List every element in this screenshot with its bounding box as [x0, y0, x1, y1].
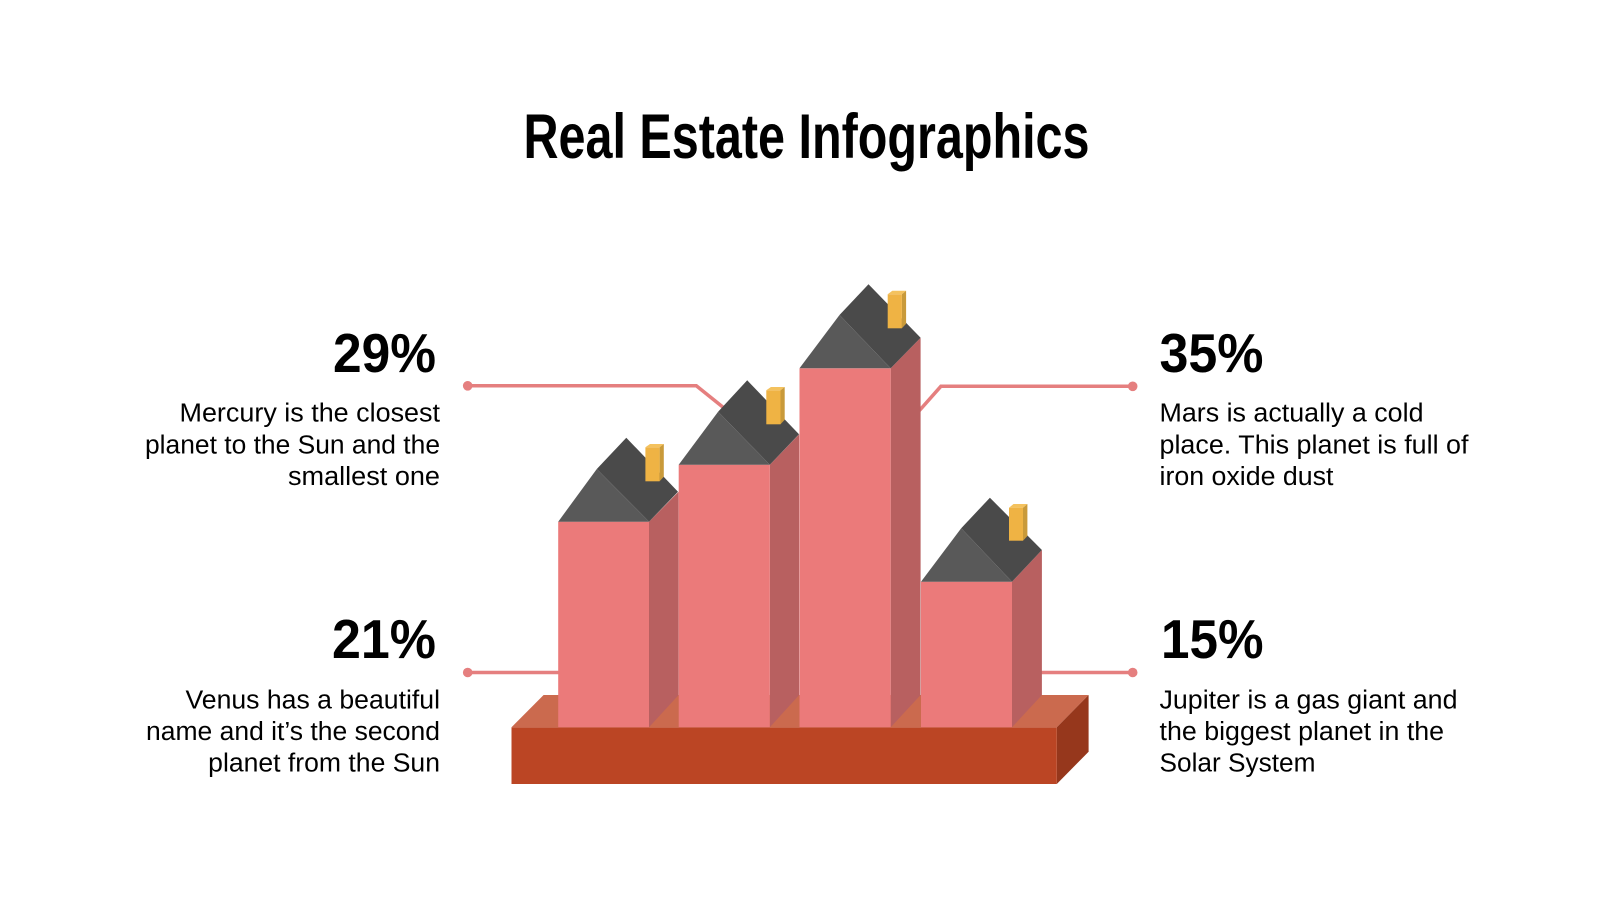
text: Venus description — [146, 686, 440, 778]
text: Mars description: Mars is actually a cold — [1160, 400, 1424, 428]
icon: chimney — [645, 444, 664, 481]
text: Mars description — [1160, 400, 1469, 491]
text: Mercury description — [145, 400, 440, 491]
house 3 — [800, 284, 921, 727]
text: Mercury description: planet to the Sun and the — [145, 431, 440, 459]
leader line: 29% — [463, 381, 724, 408]
leader line: 21% — [463, 668, 560, 677]
title: Real Estate Infographics — [524, 102, 1090, 172]
text: Mercury description: smallest one — [288, 463, 440, 491]
callout: 21% Venus — [146, 608, 440, 778]
callout: 35% Mars — [1160, 322, 1469, 491]
icon: chimney — [888, 291, 906, 328]
callout: 29% Mercury — [145, 322, 440, 491]
text: Jupiter description — [1160, 686, 1458, 778]
house 1 — [558, 438, 679, 727]
icon: chimney — [1009, 504, 1027, 541]
text: Venus description: Venus has a beautiful — [186, 686, 440, 714]
callout: 15% Jupiter — [1160, 608, 1458, 778]
house 4 — [921, 498, 1042, 727]
text: Venus description: planet from the Sun — [208, 750, 440, 778]
stat: 35%: 35% — [1160, 322, 1264, 384]
text: Jupiter description: Jupiter is a gas giant and — [1160, 686, 1458, 714]
text: Venus description: name and it’s the second — [146, 718, 440, 746]
house 2 — [679, 380, 799, 727]
text: Jupiter description: the biggest planet in the — [1160, 718, 1444, 746]
text: Jupiter description: Solar System — [1160, 750, 1316, 778]
text: Mars description: iron oxide dust — [1160, 463, 1334, 491]
stat: 29%: 29% — [333, 322, 436, 384]
stat: 21%: 21% — [332, 608, 436, 670]
icon: chimney — [766, 387, 785, 424]
stat: 15%: 15% — [1161, 608, 1264, 670]
platform base — [512, 695, 1089, 784]
text: Mars description: place. This planet is full of — [1160, 431, 1469, 459]
leader line: 15% — [1040, 668, 1137, 677]
leader line: 35% — [919, 382, 1137, 411]
text: Mercury description: Mercury is the closest — [180, 400, 440, 428]
